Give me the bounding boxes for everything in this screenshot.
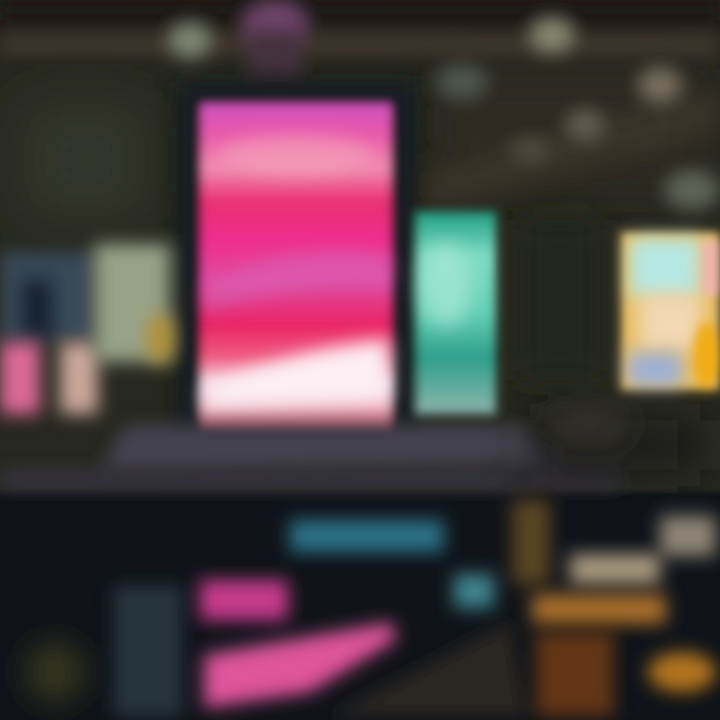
- central screen surround: [176, 82, 416, 442]
- panel: right colourful screen: [621, 232, 720, 390]
- panel: left small screens: [0, 244, 174, 414]
- right seating silhouettes: [530, 405, 700, 470]
- background: hall shading: [20, 70, 700, 380]
- ceiling: beams and lights: [0, 0, 720, 210]
- reflection: upper pink block: [200, 580, 288, 620]
- reflection: teal strip: [290, 520, 444, 552]
- foreground: table and people: [512, 500, 716, 716]
- reflection: lower pink block: [204, 622, 396, 708]
- lower left: grey and olive shapes: [25, 586, 182, 716]
- reflection: small teal block: [454, 574, 494, 608]
- stage: grey platform: [0, 425, 620, 490]
- foreground: dark diagonal: [330, 622, 526, 716]
- panel: teal screen: [416, 212, 496, 414]
- panel: pink screen: [200, 103, 392, 429]
